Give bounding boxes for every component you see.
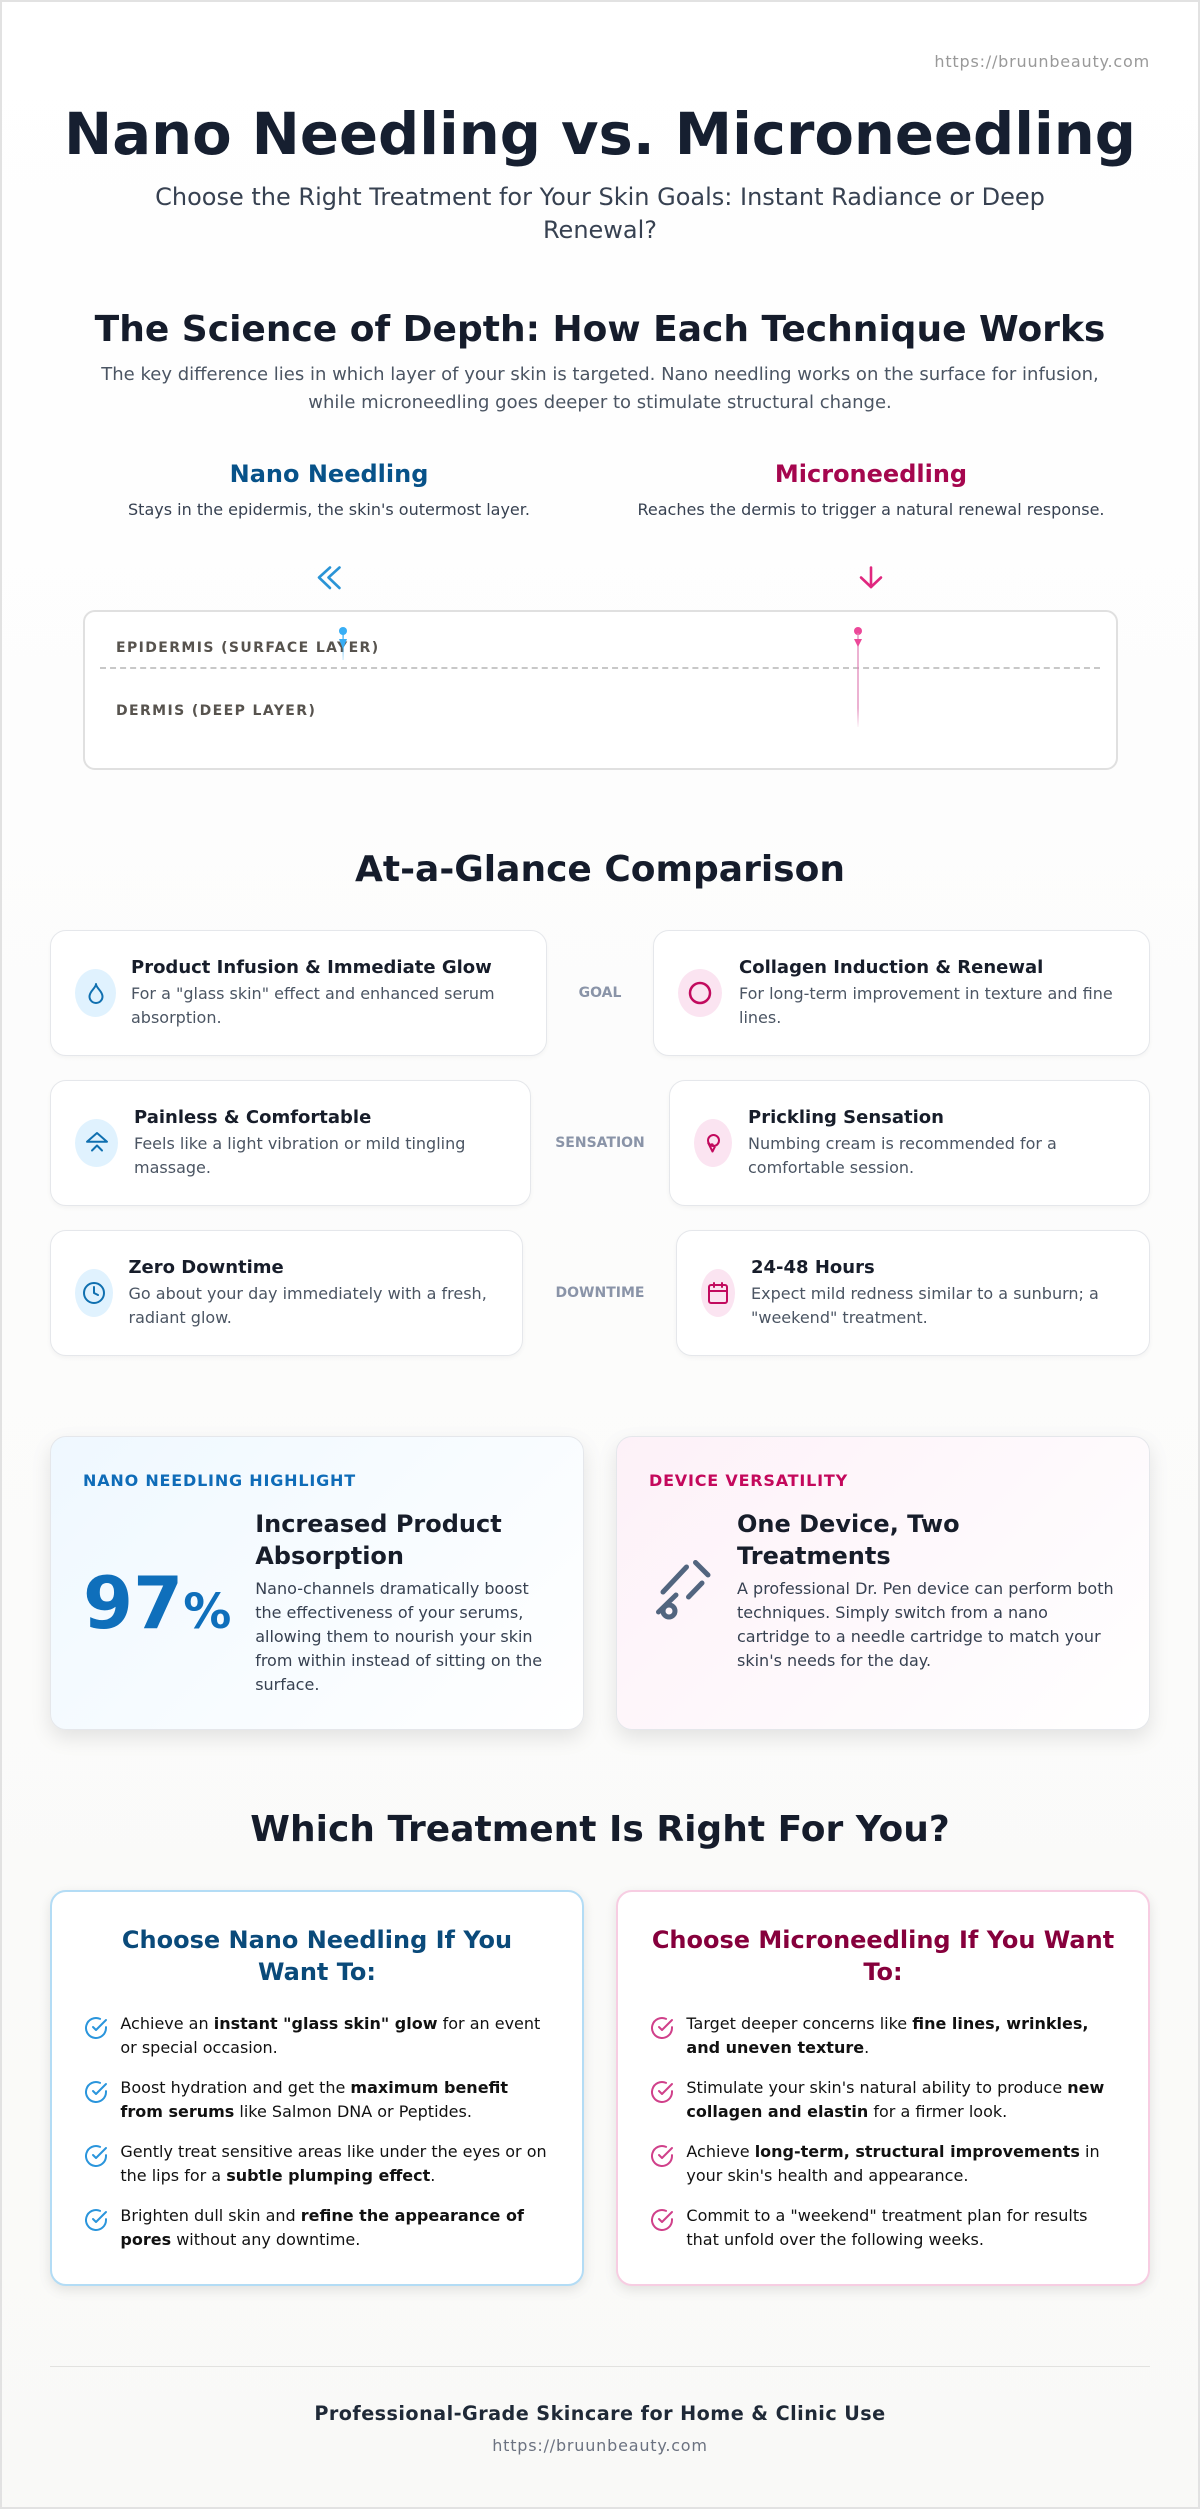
icon: water drop <box>75 969 116 1017</box>
highlight heading <box>255 1510 502 1570</box>
description: For long-term improvement in texture and fine <box>739 984 1113 1003</box>
stat: 97%: 97% <box>83 1561 231 1645</box>
item text: Commit to a "weekend" treatment plan for results <box>686 2206 1087 2225</box>
subtitle: Choose the Right Treatment for Your Skin Goals: Instant Radiance or Deep <box>155 183 1045 211</box>
item text: from serums like Salmon DNA or Peptides. <box>120 2102 472 2121</box>
nano needling column heading: Nano Needling <box>230 460 428 488</box>
description: comfortable session. <box>748 1158 914 1177</box>
item text <box>120 2014 540 2057</box>
item text <box>686 2204 1087 2252</box>
heading: which treatment: Which Treatment Is Right For You? <box>250 1809 950 1850</box>
highlight text: the effectiveness of your serums, <box>255 1603 523 1622</box>
heading: science of depth: The Science of Depth: How Each Technique Works <box>95 308 1105 350</box>
check icon <box>650 2208 674 2232</box>
highlight heading: Treatments <box>737 1542 891 1570</box>
icon: micro down arrow <box>860 566 882 588</box>
description <box>131 984 495 1027</box>
item text: collagen and elastin for a firmer look. <box>686 2102 1007 2121</box>
nano needle <box>339 627 347 660</box>
highlight text: Nano-channels dramatically boost <box>255 1579 529 1598</box>
description: Expect mild redness similar to a sunburn; a <box>751 1284 1099 1303</box>
item text: and uneven texture. <box>686 2038 869 2057</box>
title: 24-48 Hours <box>751 1257 875 1278</box>
icon: prickle <box>694 1119 732 1167</box>
title: Product Infusion & Immediate Glow <box>131 957 492 978</box>
check icon <box>84 2145 107 2167</box>
panel: choose nano needling <box>50 1890 584 2286</box>
item text <box>686 2078 1104 2121</box>
item 3 <box>651 2142 1100 2185</box>
label: dermis: DERMIS (DEEP LAYER) <box>116 703 316 719</box>
title: Zero Downtime <box>128 1257 284 1278</box>
panel heading <box>652 1926 1114 1986</box>
title: Nano Needling vs. Microneedling <box>64 101 1136 168</box>
item text <box>686 2140 1100 2188</box>
highlight label: NANO NEEDLING HIGHLIGHT <box>83 1471 356 1490</box>
subtitle <box>155 183 1045 244</box>
icon: pen tool <box>656 1560 710 1620</box>
title: Prickling Sensation <box>748 1107 944 1128</box>
panel heading: To: <box>863 1958 903 1986</box>
icon: nano double chevron <box>318 566 341 590</box>
intro paragraph: while microneedling goes deeper to stimulate structural change. <box>308 392 892 413</box>
description: absorption. <box>131 1008 222 1027</box>
nano needling description: Stays in the epidermis, the skin's outermost layer. <box>128 500 530 519</box>
item text: the lips for a subtle plumping effect. <box>120 2166 435 2185</box>
description <box>748 1134 1057 1177</box>
comparison card: micro downtime <box>676 1230 1150 1356</box>
item 1 <box>651 2014 1088 2057</box>
highlight text <box>255 1579 542 1694</box>
item text: Boost hydration and get the maximum benefit <box>120 2078 508 2097</box>
label: epidermis: EPIDERMIS (SURFACE LAYER) <box>116 640 380 656</box>
item text: Achieve long-term, structural improvements in <box>686 2142 1100 2161</box>
description: Feels like a light vibration or mild tingling <box>134 1134 465 1153</box>
check icon <box>84 2209 107 2231</box>
item text: that unfold over the following weeks. <box>686 2230 984 2249</box>
description <box>128 1284 487 1327</box>
micro needle <box>854 627 862 727</box>
description: For a "glass skin" effect and enhanced serum <box>131 984 495 1003</box>
item text: your skin's health and appearance. <box>686 2166 968 2185</box>
highlight text: surface. <box>255 1675 319 1694</box>
highlight text: allowing them to nourish your skin <box>255 1627 533 1646</box>
description <box>134 1134 465 1177</box>
comparison card: micro sensation <box>669 1080 1150 1206</box>
description: Numbing cream is recommended for a <box>748 1134 1057 1153</box>
item text: Target deeper concerns like fine lines, wrinkles, <box>686 2014 1088 2033</box>
check icon <box>651 2017 673 2039</box>
item text: Stimulate your skin's natural ability to produce new <box>686 2078 1104 2097</box>
description: lines. <box>739 1008 781 1027</box>
check icon <box>651 2145 673 2167</box>
item text: Gently treat sensitive areas like under the eyes or on <box>120 2142 547 2161</box>
panel: device versatility <box>616 1436 1150 1730</box>
item 3 <box>84 2142 547 2185</box>
item 2 <box>650 2078 1104 2121</box>
row label: goal: GOAL <box>579 985 621 1001</box>
intro paragraph: The key difference lies in which layer of your skin is targeted. Nano needling works on the surface for infusion, <box>101 364 1099 385</box>
row label: sensation: SENSATION <box>555 1135 645 1151</box>
comparison card: micro goal <box>653 930 1150 1056</box>
highlight heading: One Device, Two <box>737 1510 960 1538</box>
layer divider <box>100 667 1100 669</box>
item text: or special occasion. <box>120 2038 278 2057</box>
item 2 <box>84 2078 508 2121</box>
panel heading: Choose Nano Needling If You <box>122 1926 512 1954</box>
heading: at-a-glance: At-a-Glance Comparison <box>355 848 845 890</box>
check icon <box>84 2081 107 2103</box>
highlight text: cartridge to a needle cartridge to match your <box>737 1627 1101 1646</box>
item text: pores without any downtime. <box>120 2230 360 2249</box>
highlight text: A professional Dr. Pen device can perform both <box>737 1579 1114 1598</box>
description: massage. <box>134 1158 211 1177</box>
highlight heading: Absorption <box>255 1542 404 1570</box>
check icon <box>650 2081 673 2103</box>
description <box>751 1284 1099 1327</box>
highlight text: techniques. Simply switch from a nano <box>737 1603 1048 1622</box>
panel: skin depth diagram <box>82 610 1118 770</box>
panel: nano highlight <box>50 1436 584 1730</box>
description: "weekend" treatment. <box>751 1308 928 1327</box>
icon: clock <box>75 1269 113 1317</box>
highlight text: from within instead of sitting on the <box>255 1651 542 1670</box>
microneedling description: Reaches the dermis to trigger a natural renewal response. <box>637 500 1104 519</box>
comparison card: nano sensation <box>50 1080 531 1206</box>
comparison card: nano goal <box>50 930 547 1056</box>
description <box>739 984 1113 1027</box>
icon: calendar <box>701 1269 735 1317</box>
item 4 <box>618 2204 1148 2254</box>
highlight heading <box>737 1510 960 1570</box>
item 1 <box>85 2014 540 2057</box>
icon: vibration <box>75 1119 118 1167</box>
icon: ring <box>678 969 722 1017</box>
description: radiant glow. <box>128 1308 232 1327</box>
item text <box>120 2142 547 2185</box>
item text <box>120 2078 508 2121</box>
footer url: https://bruunbeauty.com <box>492 2436 708 2455</box>
row label: downtime: DOWNTIME <box>556 1285 644 1301</box>
panel heading: Choose Microneedling If You Want <box>652 1926 1114 1954</box>
highlight label: DEVICE VERSATILITY <box>649 1471 848 1490</box>
intro paragraph <box>101 364 1099 413</box>
highlight heading: Increased Product <box>255 1510 502 1538</box>
check icon <box>85 2017 107 2039</box>
item text: Brighten dull skin and refine the appearance of <box>120 2206 524 2225</box>
top url: https://bruunbeauty.com <box>934 52 1150 71</box>
panel heading <box>122 1926 512 1986</box>
footer title: Professional-Grade Skincare for Home & Clinic Use <box>314 2402 886 2425</box>
title: Painless & Comfortable <box>134 1107 371 1128</box>
subtitle: Renewal? <box>543 216 657 244</box>
microneedling column heading: Microneedling <box>775 460 967 488</box>
comparison card: nano downtime <box>50 1230 523 1356</box>
item text <box>686 2014 1088 2057</box>
description: Go about your day immediately with a fresh, <box>128 1284 487 1303</box>
panel heading: Want To: <box>258 1958 376 1986</box>
highlight text <box>737 1579 1114 1670</box>
item text <box>120 2206 524 2249</box>
highlight text: skin's needs for the day. <box>737 1651 931 1670</box>
item 4 <box>84 2206 524 2249</box>
item text: Achieve an instant "glass skin" glow for an event <box>120 2014 540 2033</box>
title: Collagen Induction & Renewal <box>739 957 1043 978</box>
panel: choose microneedling <box>616 1890 1150 2286</box>
